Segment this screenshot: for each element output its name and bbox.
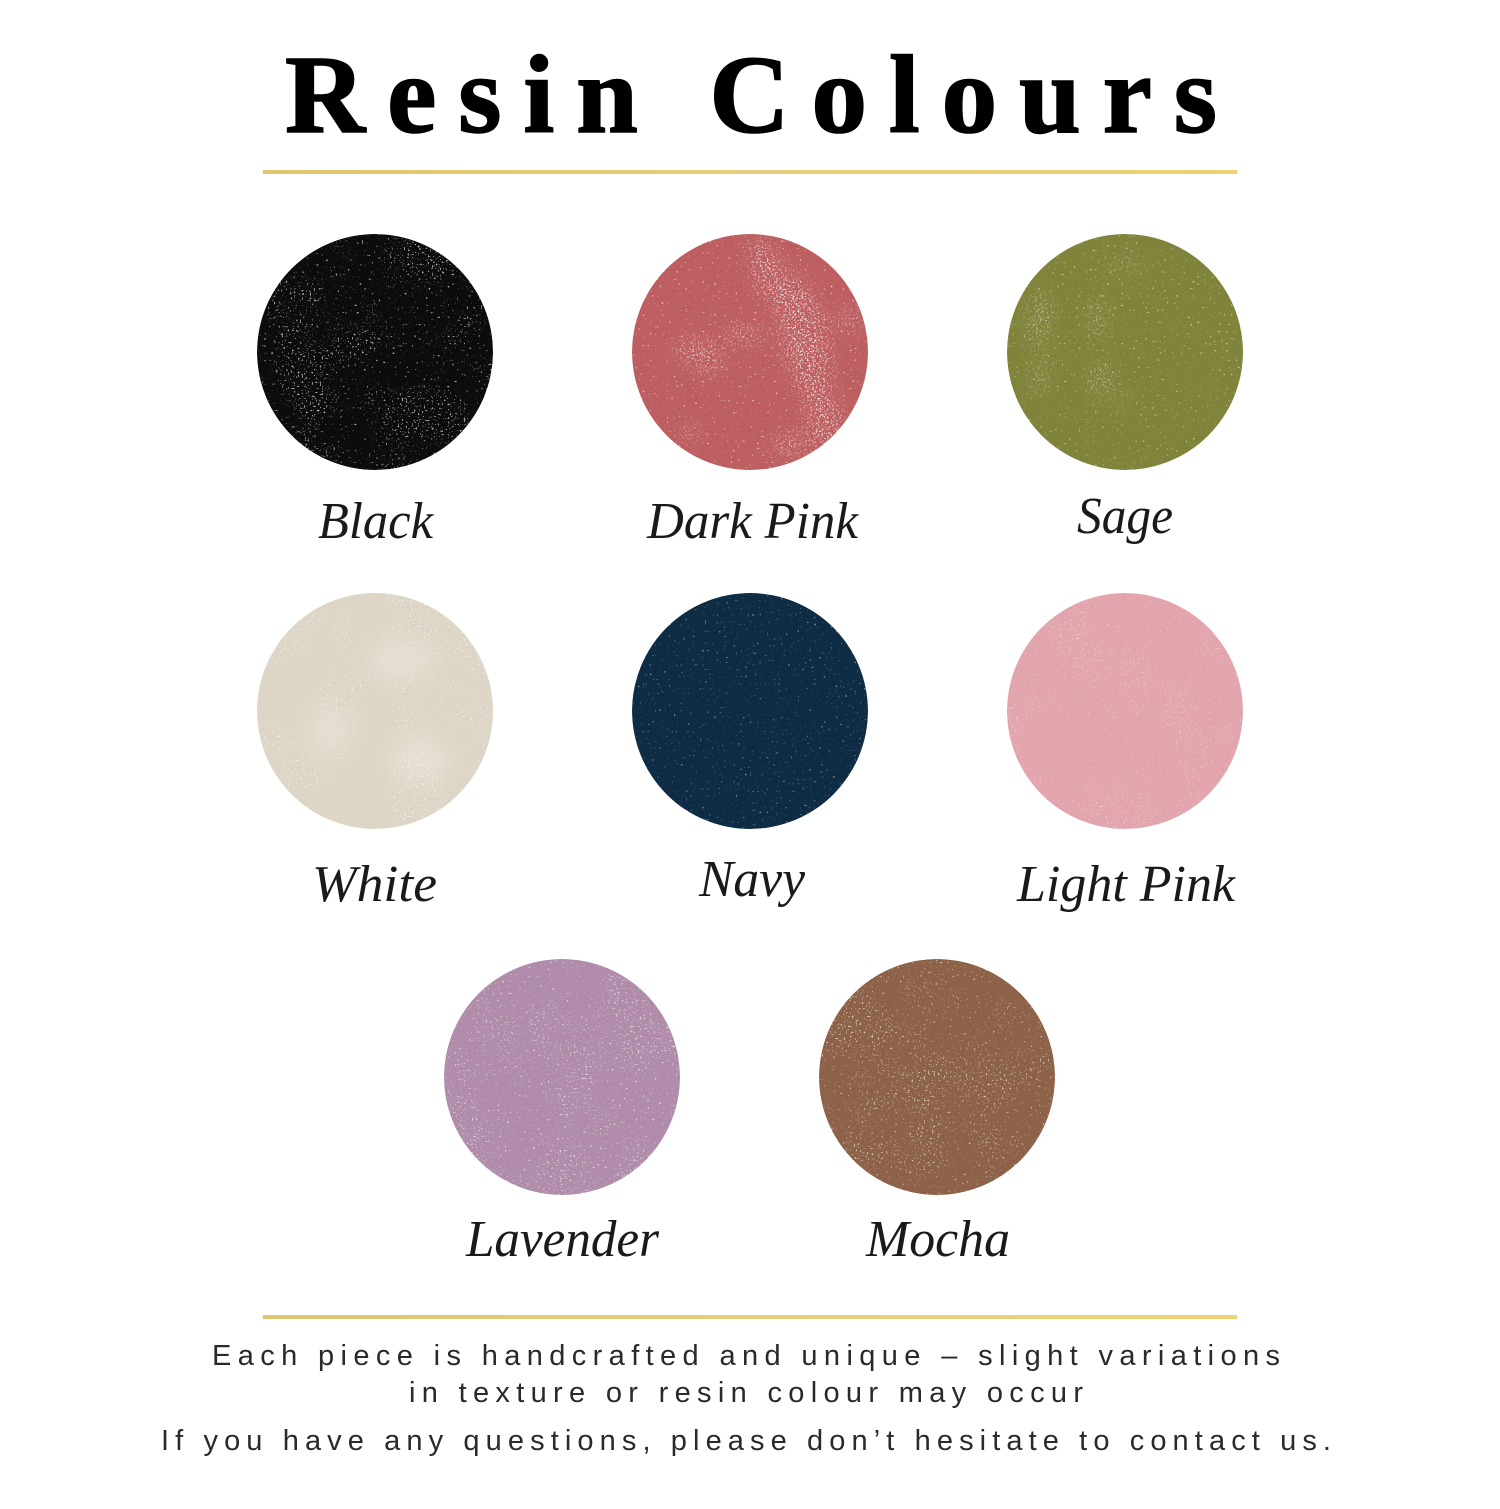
footer note: Each piece is handcrafted and unique – slight variations xyxy=(212,1340,1280,1372)
footer note xyxy=(161,1340,1331,1457)
label: black: Black xyxy=(318,493,434,550)
label: mocha: Mocha xyxy=(865,1211,1010,1268)
label: navy: Navy xyxy=(698,851,806,908)
label: light pink: Light Pink xyxy=(1016,856,1236,913)
swatch: sage xyxy=(1007,234,1243,470)
footer note: If you have any questions, please don’t hesitate to contact us. xyxy=(161,1425,1331,1457)
label: sage: Sage xyxy=(1077,488,1173,545)
label: dark pink: Dark Pink xyxy=(646,493,859,550)
label: lavender: Lavender xyxy=(465,1211,660,1268)
swatch: light pink xyxy=(1007,593,1243,829)
swatch: black xyxy=(257,234,493,470)
top gold divider xyxy=(263,170,1237,174)
swatch: white xyxy=(257,593,493,829)
bottom gold divider xyxy=(263,1315,1237,1319)
swatch: dark pink xyxy=(632,234,868,470)
label: white: White xyxy=(312,856,437,913)
footer note: in texture or resin colour may occur xyxy=(409,1377,1083,1409)
swatch: mocha xyxy=(819,959,1055,1195)
title: Resin Colours xyxy=(285,34,1217,157)
swatch: lavender xyxy=(444,959,680,1195)
swatch: navy xyxy=(632,593,868,829)
